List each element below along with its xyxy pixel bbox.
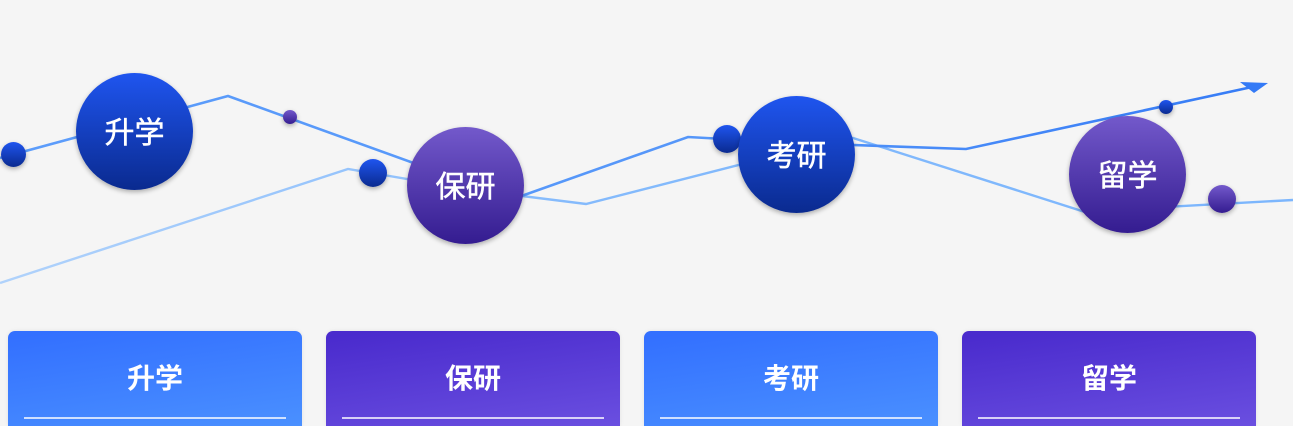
heading: 保研: 保研 — [445, 363, 501, 394]
node: 留学 — [1069, 116, 1186, 233]
node: 升学 — [76, 73, 193, 190]
dot 5 — [1158, 100, 1172, 114]
node: 保研 — [407, 127, 524, 244]
node: 考研: 考研 — [766, 140, 826, 173]
panel: 保研 — [326, 331, 620, 426]
node: 保研: 保研 — [436, 171, 496, 204]
node: 留学: 留学 — [1098, 160, 1158, 193]
panel: 留学 — [962, 331, 1256, 426]
dot 2 — [283, 110, 297, 124]
node: 升学: 升学 — [104, 117, 164, 150]
panel: 考研 — [644, 331, 938, 426]
dot 6 — [1208, 185, 1236, 213]
heading: 考研: 考研 — [763, 363, 819, 394]
heading: 留学: 留学 — [1081, 363, 1137, 394]
dot 3 — [359, 158, 387, 186]
heading: 升学: 升学 — [127, 363, 183, 394]
dot 1 — [1, 142, 26, 167]
node: 考研 — [738, 96, 855, 213]
dot 4 — [713, 125, 741, 153]
panel: 升学 — [8, 331, 302, 426]
